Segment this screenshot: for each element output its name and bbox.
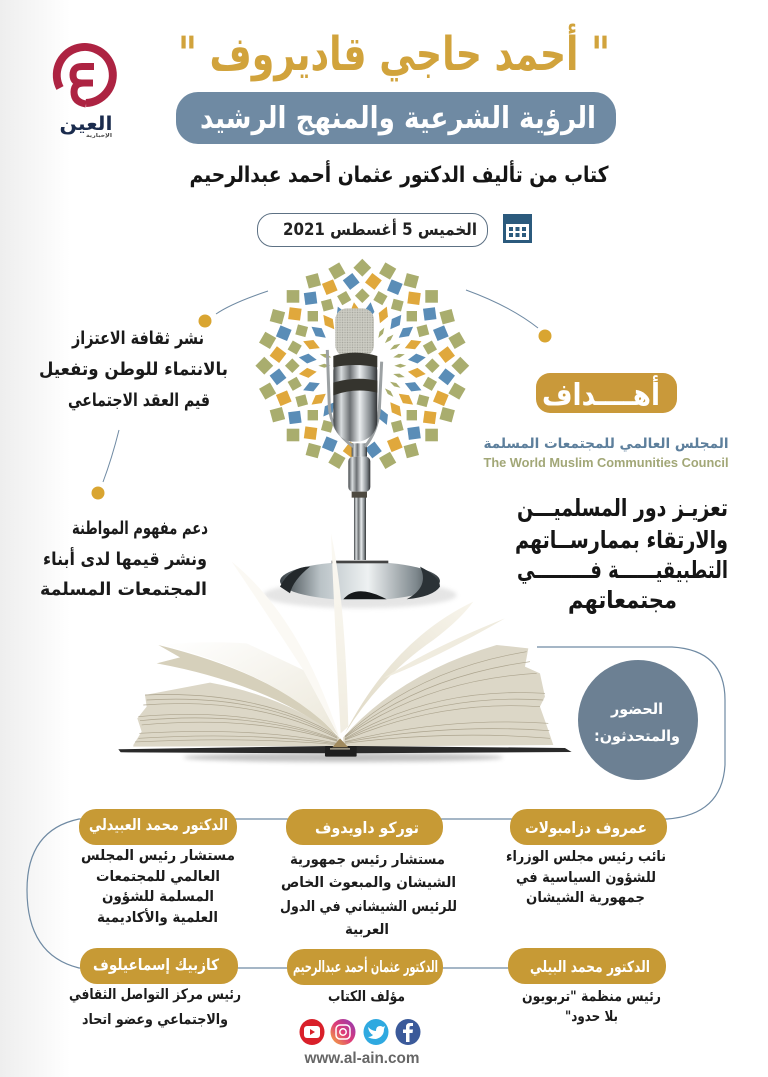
speaker 2 — [280, 809, 457, 938]
microphone — [263, 308, 457, 608]
tall centre leaf — [331, 533, 348, 733]
circle: attendees and speakers — [578, 660, 698, 780]
left upper leaves — [157, 642, 339, 737]
date pill: الخميس 5 أغسطس 2021 — [283, 219, 477, 239]
goal text: left top — [39, 328, 228, 411]
icon: calendar — [503, 214, 532, 243]
book cover — [118, 738, 572, 757]
book shadow — [183, 753, 503, 762]
goal text: left bottom: المجتمعات المسلمة — [40, 579, 207, 600]
goal text: left bottom: ونشر قيمها لدى أبناء — [43, 547, 207, 570]
speaker 1: عمروف دزامبولات — [525, 819, 647, 837]
goal text: left top: نشر ثقافة الاعتزاز — [71, 328, 204, 349]
speaker 3: العالمي للمجتمعات — [96, 869, 220, 885]
subtitle pill: الرؤية الشرعية والمنهج الرشيد — [200, 101, 596, 136]
council logo text: المجلس العالمي للمجتمعات المسلمة — [484, 436, 728, 452]
circle: attendees and speakers: الحضور — [610, 700, 663, 718]
speaker 1 — [506, 809, 667, 906]
logo: Al-Ain: العين — [60, 113, 112, 135]
speaker 2: الشيشان والمبعوث الخاص — [281, 875, 456, 891]
goal text: left bottom — [40, 518, 208, 600]
right turning leaves — [345, 602, 505, 733]
speaker 2: العربية — [345, 922, 389, 938]
timeline connector — [27, 647, 725, 968]
left page stack — [133, 683, 339, 747]
connector: top right arc with dot — [466, 290, 552, 342]
goal text: left top: بالانتماء للوطن وتفعيل — [39, 359, 228, 380]
website url: www.al-ain.com — [304, 1050, 420, 1067]
speaker 3: مستشار رئيس المجلس — [81, 848, 235, 864]
mic capsule — [333, 308, 377, 442]
speaker 6: كازبيك إسماعيلوف — [93, 956, 220, 974]
mic base — [263, 561, 457, 608]
mic fork — [327, 350, 382, 447]
circle: attendees and speakers: والمتحدثون: — [594, 727, 680, 745]
logo: Al-Ain: الإخبارية — [86, 133, 112, 139]
open book — [118, 533, 572, 762]
goal text: right: مجتمعاتهم — [568, 586, 677, 614]
speaker 5: مؤلف الكتاب — [328, 989, 405, 1005]
speaker 2: للرئيس الشيشاني في الدول — [280, 899, 457, 915]
speaker 5: الدكتور عثمان أحمد عبدالرحيم — [293, 957, 438, 976]
speaker 4: رئيس منظمة "تربويون — [522, 989, 661, 1005]
speaker 5 — [287, 949, 443, 1005]
subtitle pill — [176, 92, 616, 144]
speaker 4: بلا حدود" — [565, 1009, 618, 1025]
connector: left second arc with dot — [92, 430, 119, 500]
goal text: right — [515, 494, 728, 614]
date pill — [258, 214, 488, 246]
tall turning leaf left — [232, 562, 339, 737]
right page stack — [343, 645, 553, 747]
speaker 6 — [69, 948, 241, 1028]
icon: youtube — [300, 1019, 324, 1045]
speaker 6: والاجتماعي وعضو اتحاد — [82, 1012, 228, 1028]
speaker 6: رئيس مركز التواصل الثقافي — [69, 987, 241, 1003]
logo: Al-Ain — [57, 47, 113, 139]
icon: instagram — [330, 1019, 356, 1045]
heading: goals: أهــــداف — [542, 375, 660, 413]
speaker 3 — [79, 809, 237, 926]
speaker 1: جمهورية الشيشان — [526, 890, 645, 906]
mic stem — [348, 443, 370, 560]
connector: top left arc with dot — [198, 291, 268, 328]
speaker 3: المسلمة للشؤون — [102, 889, 214, 905]
speaker 2: مستشار رئيس جمهورية — [290, 852, 445, 868]
council logo text: The World Muslim Communities Council — [484, 455, 728, 470]
speaker 2: توركو داويدوف — [315, 819, 419, 837]
book author line: كتاب من تأليف الدكتور عثمان أحمد عبدالرحيم — [190, 159, 609, 188]
goal text: left bottom: دعم مفهوم المواطنة — [72, 518, 208, 539]
icon: twitter — [364, 1019, 388, 1045]
council logo text — [484, 436, 728, 470]
speaker 1: للشؤون السياسية في — [516, 870, 656, 886]
social icons — [300, 1019, 420, 1045]
icon: facebook — [396, 1019, 420, 1045]
speaker 4 — [508, 948, 666, 1025]
title: " أحمد حاجي قاديروف " — [178, 23, 610, 82]
rosette mosaic — [255, 259, 469, 469]
speaker 3: العلمية والأكاديمية — [97, 908, 218, 926]
speaker 1: نائب رئيس مجلس الوزراء — [506, 849, 666, 865]
speaker 3: الدكتور محمد العبيدلي — [89, 816, 228, 835]
speaker 4: الدكتور محمد البيلي — [530, 958, 650, 977]
goal text: left top: قيم العقد الاجتماعي — [68, 390, 210, 411]
